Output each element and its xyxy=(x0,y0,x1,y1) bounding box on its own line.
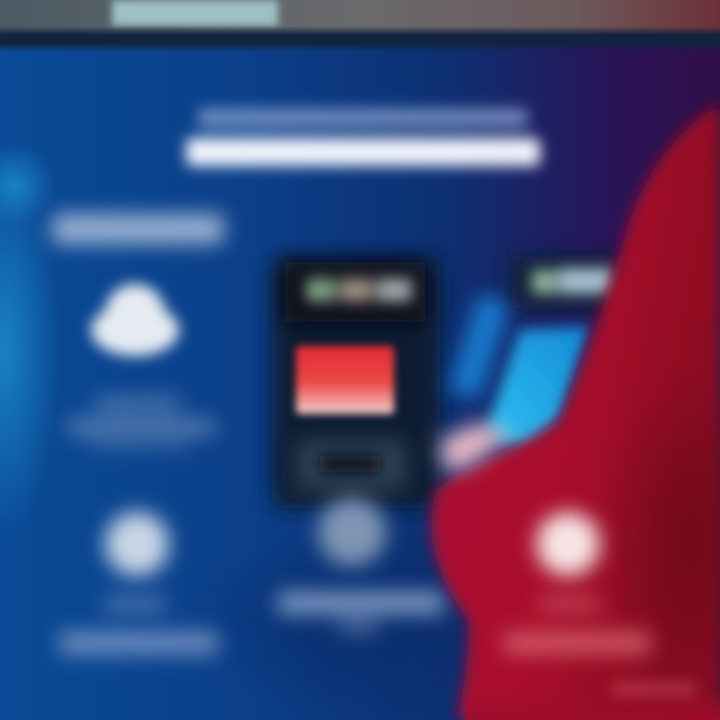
hand silhouette xyxy=(431,105,720,720)
second phone dark header xyxy=(512,256,624,308)
text block: red column caption xyxy=(504,598,650,654)
phone red card xyxy=(296,346,394,414)
panel: left glowing edge xyxy=(0,143,60,540)
second phone cyan screen xyxy=(484,326,590,452)
darker hand shading xyxy=(600,360,720,720)
panel: first phone xyxy=(272,258,440,508)
slanted blue phone edge xyxy=(448,296,512,398)
phone app icon row xyxy=(306,278,412,302)
text block: phone column caption xyxy=(278,592,444,632)
text block: first feature xyxy=(68,398,216,448)
left column heading xyxy=(52,214,224,244)
icon: cloud xyxy=(91,284,179,356)
top bar highlighted tab xyxy=(112,0,278,26)
fingertip highlight xyxy=(440,422,512,472)
icon: circular badge xyxy=(105,512,169,576)
panel: red hand xyxy=(431,105,720,720)
bottom edge fill xyxy=(466,690,720,720)
panel: left column xyxy=(52,214,224,654)
dark band under top bar xyxy=(0,26,720,52)
text block: second feature xyxy=(60,598,218,654)
phone lower panel xyxy=(296,440,406,490)
lower background shading xyxy=(190,520,530,720)
text block: corner caption xyxy=(612,682,696,696)
title xyxy=(186,108,540,166)
phone body xyxy=(272,258,440,508)
panel: second phone xyxy=(448,256,624,452)
second phone icon row xyxy=(532,268,614,294)
icon: phone column badge xyxy=(318,498,386,566)
icon: white badge xyxy=(536,512,600,576)
top browser bar xyxy=(0,0,720,52)
